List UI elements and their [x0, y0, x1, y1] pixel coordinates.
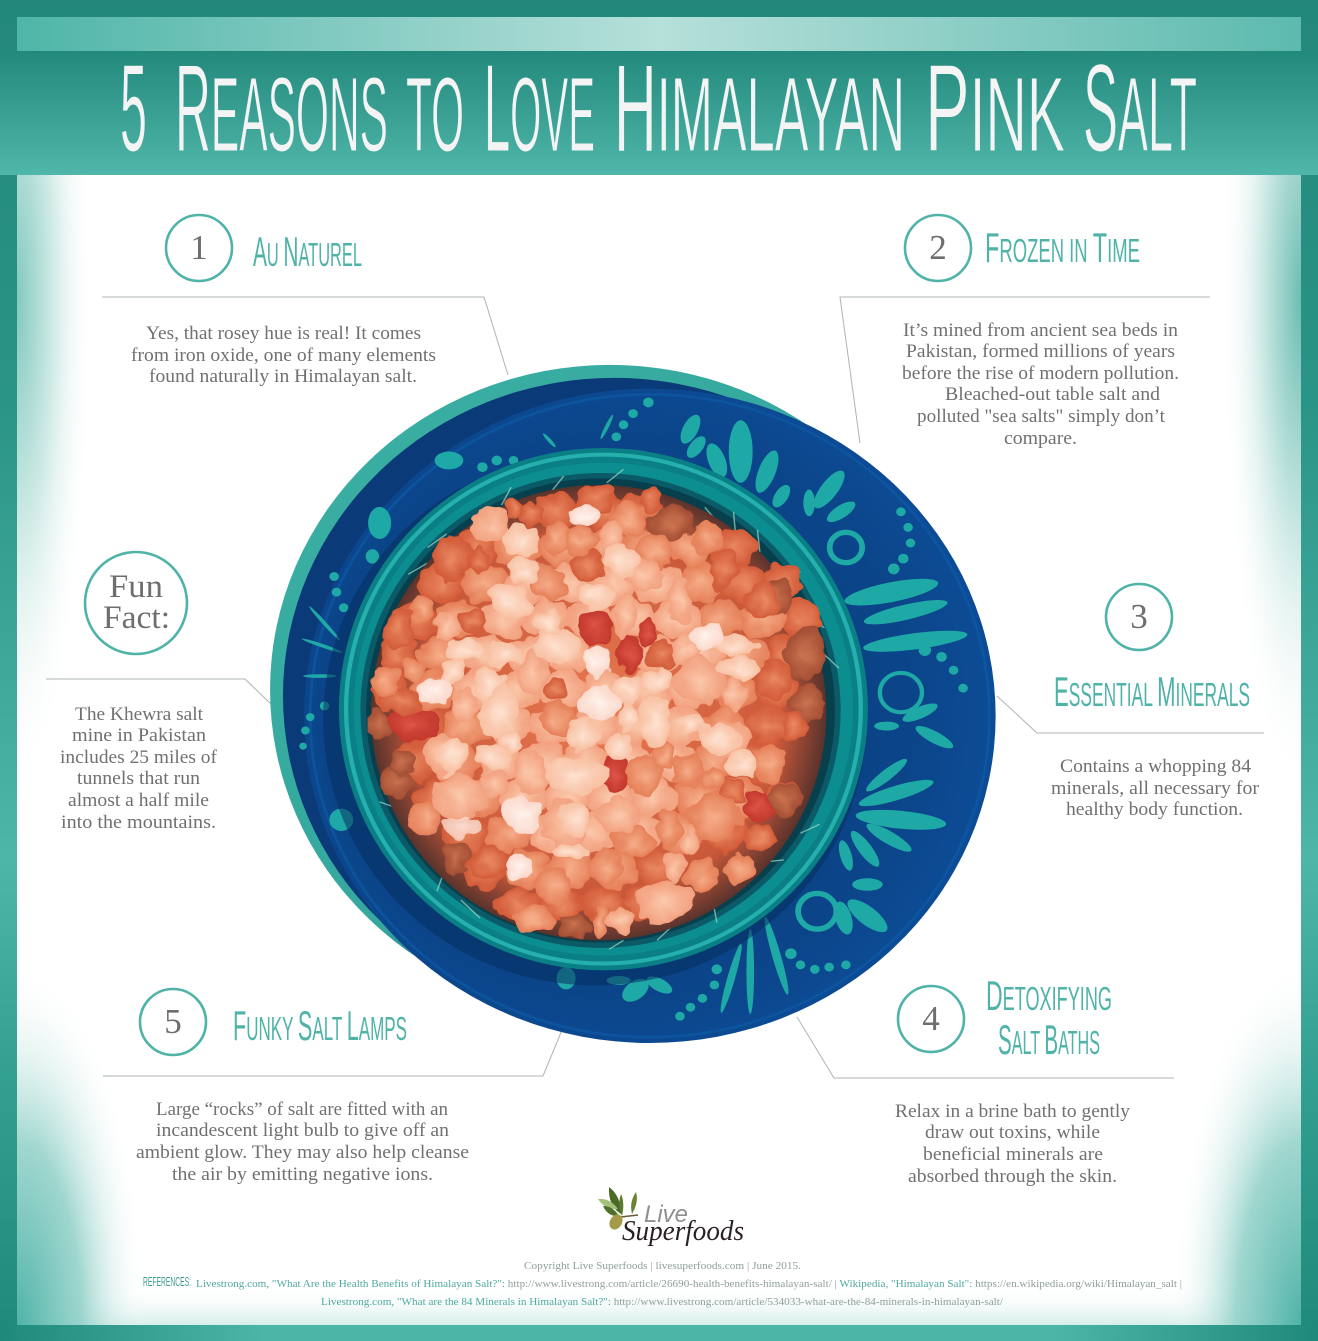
number 1 badge: 1	[190, 228, 208, 267]
body text: Yes, that rosey hue is real! It comes	[146, 324, 421, 344]
body text: almost a half mile	[68, 791, 209, 811]
body text: beneficial minerals are	[923, 1145, 1103, 1165]
header band	[0, 51, 1318, 175]
body text: the air by emitting negative ions.	[172, 1165, 433, 1185]
salt crystals	[368, 483, 825, 940]
title: LOVE	[484, 40, 595, 178]
connector lines	[46, 297, 1264, 1078]
body text	[136, 1100, 469, 1185]
fun fact badge	[85, 552, 187, 654]
body text: Bleached-out table salt and	[945, 385, 1161, 405]
title: SALT	[1083, 40, 1197, 178]
heading	[986, 972, 1112, 1063]
section 1: Au Naturel	[131, 215, 436, 387]
references: Livestrong.com, "What Are the Health Benefits of Himalayan Salt?": http://www.livestrong.com/article/26690-health-benefits-himalayan-salt/ | Wikipedia, "Himalayan Salt": https://en.wikipedia.org/wiki/Himalayan_salt |	[196, 1278, 1182, 1290]
salt bowl photo illustration	[270, 365, 996, 1043]
section 3: Essential Minerals	[1051, 584, 1259, 820]
body text: tunnels that run	[77, 769, 200, 789]
body text: Relax in a brine bath to gently	[895, 1102, 1131, 1122]
salt mound	[371, 485, 826, 940]
body text: It’s mined from ancient sea beds in	[903, 321, 1178, 341]
heading: AU NATUREL	[253, 228, 362, 275]
body text	[902, 321, 1179, 449]
heading: FUNKY SALT LAMPS	[233, 1002, 407, 1049]
fun fact badge: Fun	[109, 569, 163, 605]
body text: draw out toxins, while	[925, 1123, 1100, 1143]
body text: healthy body function.	[1066, 800, 1243, 820]
body text: mine in Pakistan	[72, 726, 206, 746]
copyright line: Copyright Live Superfoods | livesuperfoods.com | June 2015.	[524, 1260, 801, 1272]
body text: ambient glow. They may also help cleanse	[136, 1143, 469, 1163]
body text: Large “rocks” of salt are fitted with an	[156, 1100, 448, 1120]
logo: Live Superfoods: Superfoods	[622, 1216, 744, 1247]
body text: The Khewra salt	[75, 705, 204, 725]
title: REASONS	[175, 40, 388, 178]
title: 5	[120, 40, 147, 178]
body text: before the rise of modern pollution.	[902, 364, 1179, 384]
number 5 badge	[140, 989, 206, 1055]
body text: found naturally in Himalayan salt.	[149, 367, 417, 387]
references: REFERENCES:	[143, 1274, 191, 1289]
body text	[60, 705, 218, 833]
section 5: Funky Salt Lamps	[136, 989, 469, 1185]
body text: incandescent light bulb to give off an	[156, 1121, 449, 1141]
number 5 badge: 5	[164, 1002, 182, 1041]
body text: from iron oxide, one of many elements	[131, 346, 436, 366]
references	[143, 1274, 1182, 1308]
filler crystals, outer ring	[372, 494, 820, 922]
body text	[131, 324, 436, 387]
body text: compare.	[1004, 429, 1077, 449]
filler crystals, centre	[452, 564, 723, 853]
body text: includes 25 miles of	[60, 748, 218, 768]
title	[120, 40, 1197, 178]
section 2: Frozen in Time	[902, 215, 1179, 449]
plate decoration	[299, 397, 969, 1021]
bottom band	[0, 1325, 1318, 1341]
section 4: Detoxifying Salt Baths	[895, 972, 1131, 1187]
title: HIMALAYAN	[614, 40, 905, 178]
body text	[1051, 757, 1259, 820]
logo: Live Superfoods	[598, 1187, 744, 1247]
title: TO	[406, 56, 464, 174]
heading: DETOXIFYING	[986, 972, 1112, 1019]
number 4 badge: 4	[922, 999, 940, 1038]
bowl	[323, 453, 866, 985]
body text: Contains a whopping 84	[1060, 757, 1251, 777]
back plate	[270, 365, 950, 1015]
body text	[895, 1102, 1131, 1187]
top light bar	[17, 17, 1301, 51]
heading: FROZEN IN TIME	[985, 224, 1140, 271]
number 2 badge: 2	[929, 228, 947, 267]
references: Livestrong.com, "What are the 84 Minerals in Himalayan Salt?": http://www.livestrong.com/article/534033-what-are-the-84-minerals-in-himalayan-salt/	[321, 1296, 1004, 1308]
body text: polluted "sea salts" simply don’t	[917, 407, 1166, 427]
bowl inner etched lines	[380, 469, 839, 949]
number 3 badge	[1106, 584, 1172, 650]
filler crystals, middle ring	[409, 528, 785, 889]
fun fact	[60, 552, 218, 833]
title: PINK	[925, 40, 1065, 178]
number 1 badge	[166, 215, 232, 281]
number 4 badge	[898, 986, 964, 1052]
fun fact badge: Fact:	[103, 600, 170, 636]
icon: olive branch	[598, 1187, 638, 1232]
heading: SALT BATHS	[998, 1016, 1100, 1063]
body text: into the mountains.	[61, 813, 216, 833]
number 2 badge	[905, 215, 971, 281]
body text: absorbed through the skin.	[908, 1167, 1117, 1187]
body text: Pakistan, formed millions of years	[906, 342, 1175, 362]
body text: minerals, all necessary for	[1051, 779, 1259, 799]
heading: ESSENTIAL MINERALS	[1054, 668, 1250, 715]
front plate	[304, 389, 996, 1043]
wordmark: Live	[644, 1201, 688, 1228]
number 3 badge: 3	[1130, 597, 1148, 636]
